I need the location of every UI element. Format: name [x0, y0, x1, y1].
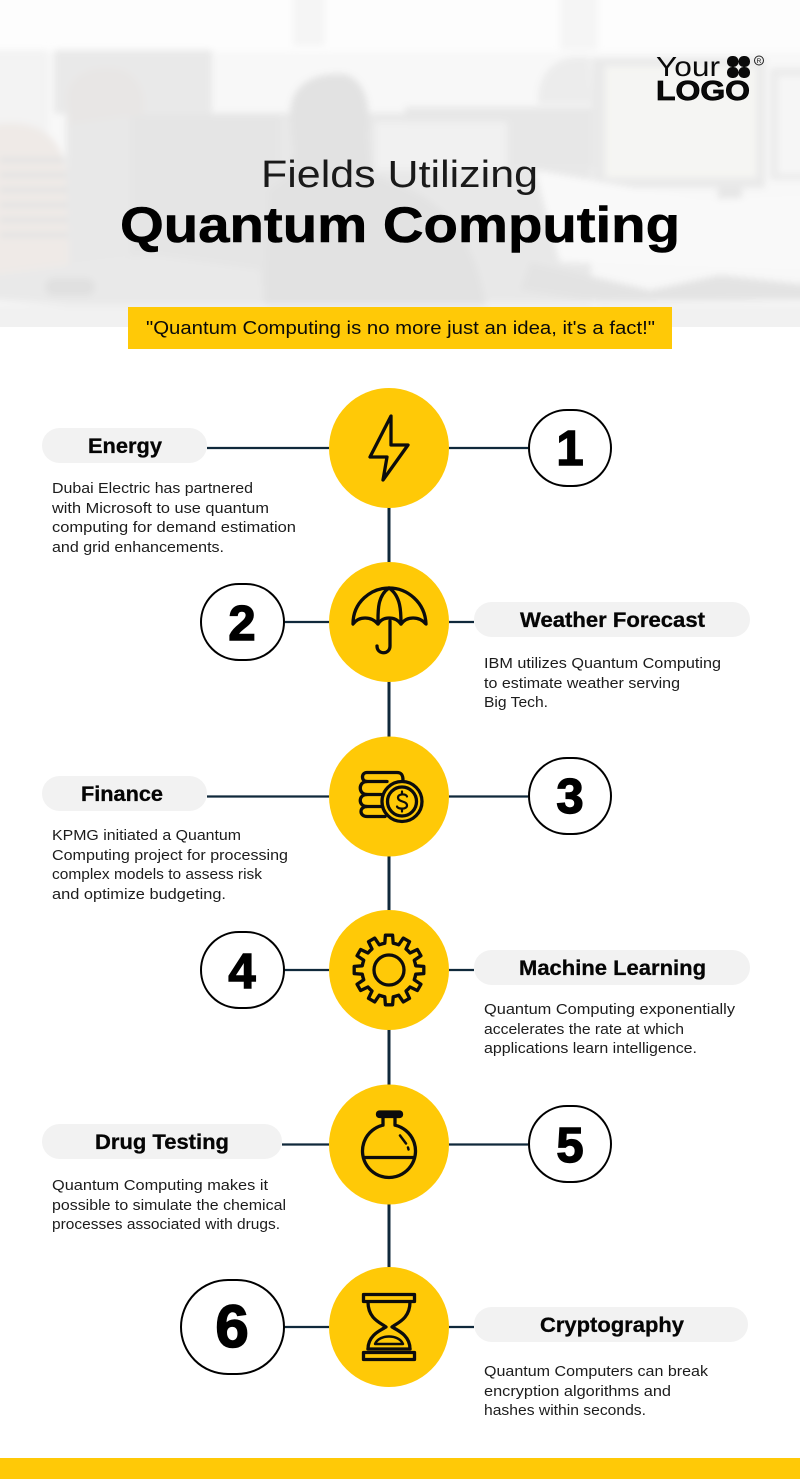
number 5: 5 [556, 1119, 584, 1173]
text: finance description: complex models to assess risk [52, 867, 263, 883]
icon: hourglass [364, 1294, 414, 1360]
text: drug testing description [52, 1178, 286, 1233]
text: finance description: KPMG initiated a Quantum [52, 828, 241, 844]
text: cryptography description: encryption algorithms and [484, 1384, 671, 1400]
icon: coins [360, 772, 422, 822]
quote banner [128, 307, 672, 349]
text: machine learning description: applications learn intelligence. [484, 1041, 697, 1057]
central timeline line [388, 500, 390, 1275]
number 6: 6 [215, 1293, 249, 1360]
text: energy description: Dubai Electric has partnered [52, 481, 253, 497]
text: drug testing description: Quantum Computing makes it [52, 1178, 268, 1194]
number 1 [529, 410, 611, 486]
logo: R [757, 58, 762, 65]
label: finance [42, 776, 207, 811]
item 2: weather forecast [201, 562, 750, 711]
label: cryptography: Cryptography [540, 1314, 684, 1337]
label: machine learning: Machine Learning [519, 957, 706, 980]
number 2 [201, 584, 284, 660]
text: weather description: IBM utilizes Quantum Computing [484, 656, 721, 672]
text: weather description: Big Tech. [484, 695, 548, 711]
number 3: 3 [556, 770, 584, 824]
title: Quantum Computing [120, 197, 680, 253]
number 6 [181, 1280, 284, 1374]
quote banner: "Quantum Computing is no more just an idea, it's a fact!" [146, 318, 655, 338]
number 1: 1 [556, 422, 584, 476]
label: finance: Finance [81, 783, 163, 806]
label: weather forecast [474, 602, 750, 637]
label: weather forecast: Weather Forecast [520, 609, 705, 632]
number 4 [201, 932, 284, 1008]
text: finance description: Computing project for processing [52, 848, 288, 864]
text: energy description [51, 481, 296, 556]
text: cryptography description [484, 1364, 709, 1419]
logo: Your [656, 51, 720, 82]
number 3 [529, 758, 611, 834]
text: energy description: computing for demand estimation [52, 520, 296, 536]
text: cryptography description: hashes within seconds. [484, 1403, 646, 1419]
number 5 [529, 1106, 611, 1182]
icon: lightning bolt [370, 416, 408, 480]
text: machine learning description: Quantum Computing exponentially [484, 1002, 736, 1018]
text: drug testing description: possible to simulate the chemical [52, 1198, 286, 1214]
text: machine learning description [484, 1002, 736, 1057]
number 2: 2 [228, 597, 256, 651]
text: energy description: with Microsoft to use quantum [51, 501, 269, 517]
icon: gear [354, 935, 424, 1005]
label: drug testing [42, 1124, 282, 1159]
label: energy [42, 428, 207, 463]
text: finance description [52, 828, 288, 903]
number 4: 4 [228, 945, 256, 999]
item 6: cryptography [181, 1267, 748, 1419]
text: weather description: to estimate weather serving [484, 676, 680, 692]
title [120, 154, 680, 253]
label: machine learning [474, 950, 750, 985]
logo: LOGO [656, 75, 750, 106]
text: drug testing description: processes associated with drugs. [52, 1217, 280, 1233]
header background photo [0, 0, 800, 337]
item 1: energy [42, 388, 611, 556]
item 5: drug testing [42, 1084, 611, 1233]
icon: umbrella [353, 588, 426, 653]
text: finance description: and optimize budgeting. [52, 887, 226, 903]
label: drug testing: Drug Testing [95, 1131, 229, 1154]
text: machine learning description: accelerates the rate at which [484, 1022, 684, 1038]
text: cryptography description: Quantum Computers can break [484, 1364, 709, 1380]
text: weather description [484, 656, 721, 711]
item 3: finance [42, 736, 611, 903]
footer bar [0, 1458, 800, 1479]
logo [656, 51, 764, 106]
item 4: machine learning [201, 910, 750, 1057]
icon: flask [362, 1112, 416, 1178]
text: energy description: and grid enhancements. [52, 540, 224, 556]
label: cryptography [474, 1307, 748, 1342]
label: energy: Energy [88, 435, 162, 458]
title: Fields Utilizing [261, 154, 538, 196]
